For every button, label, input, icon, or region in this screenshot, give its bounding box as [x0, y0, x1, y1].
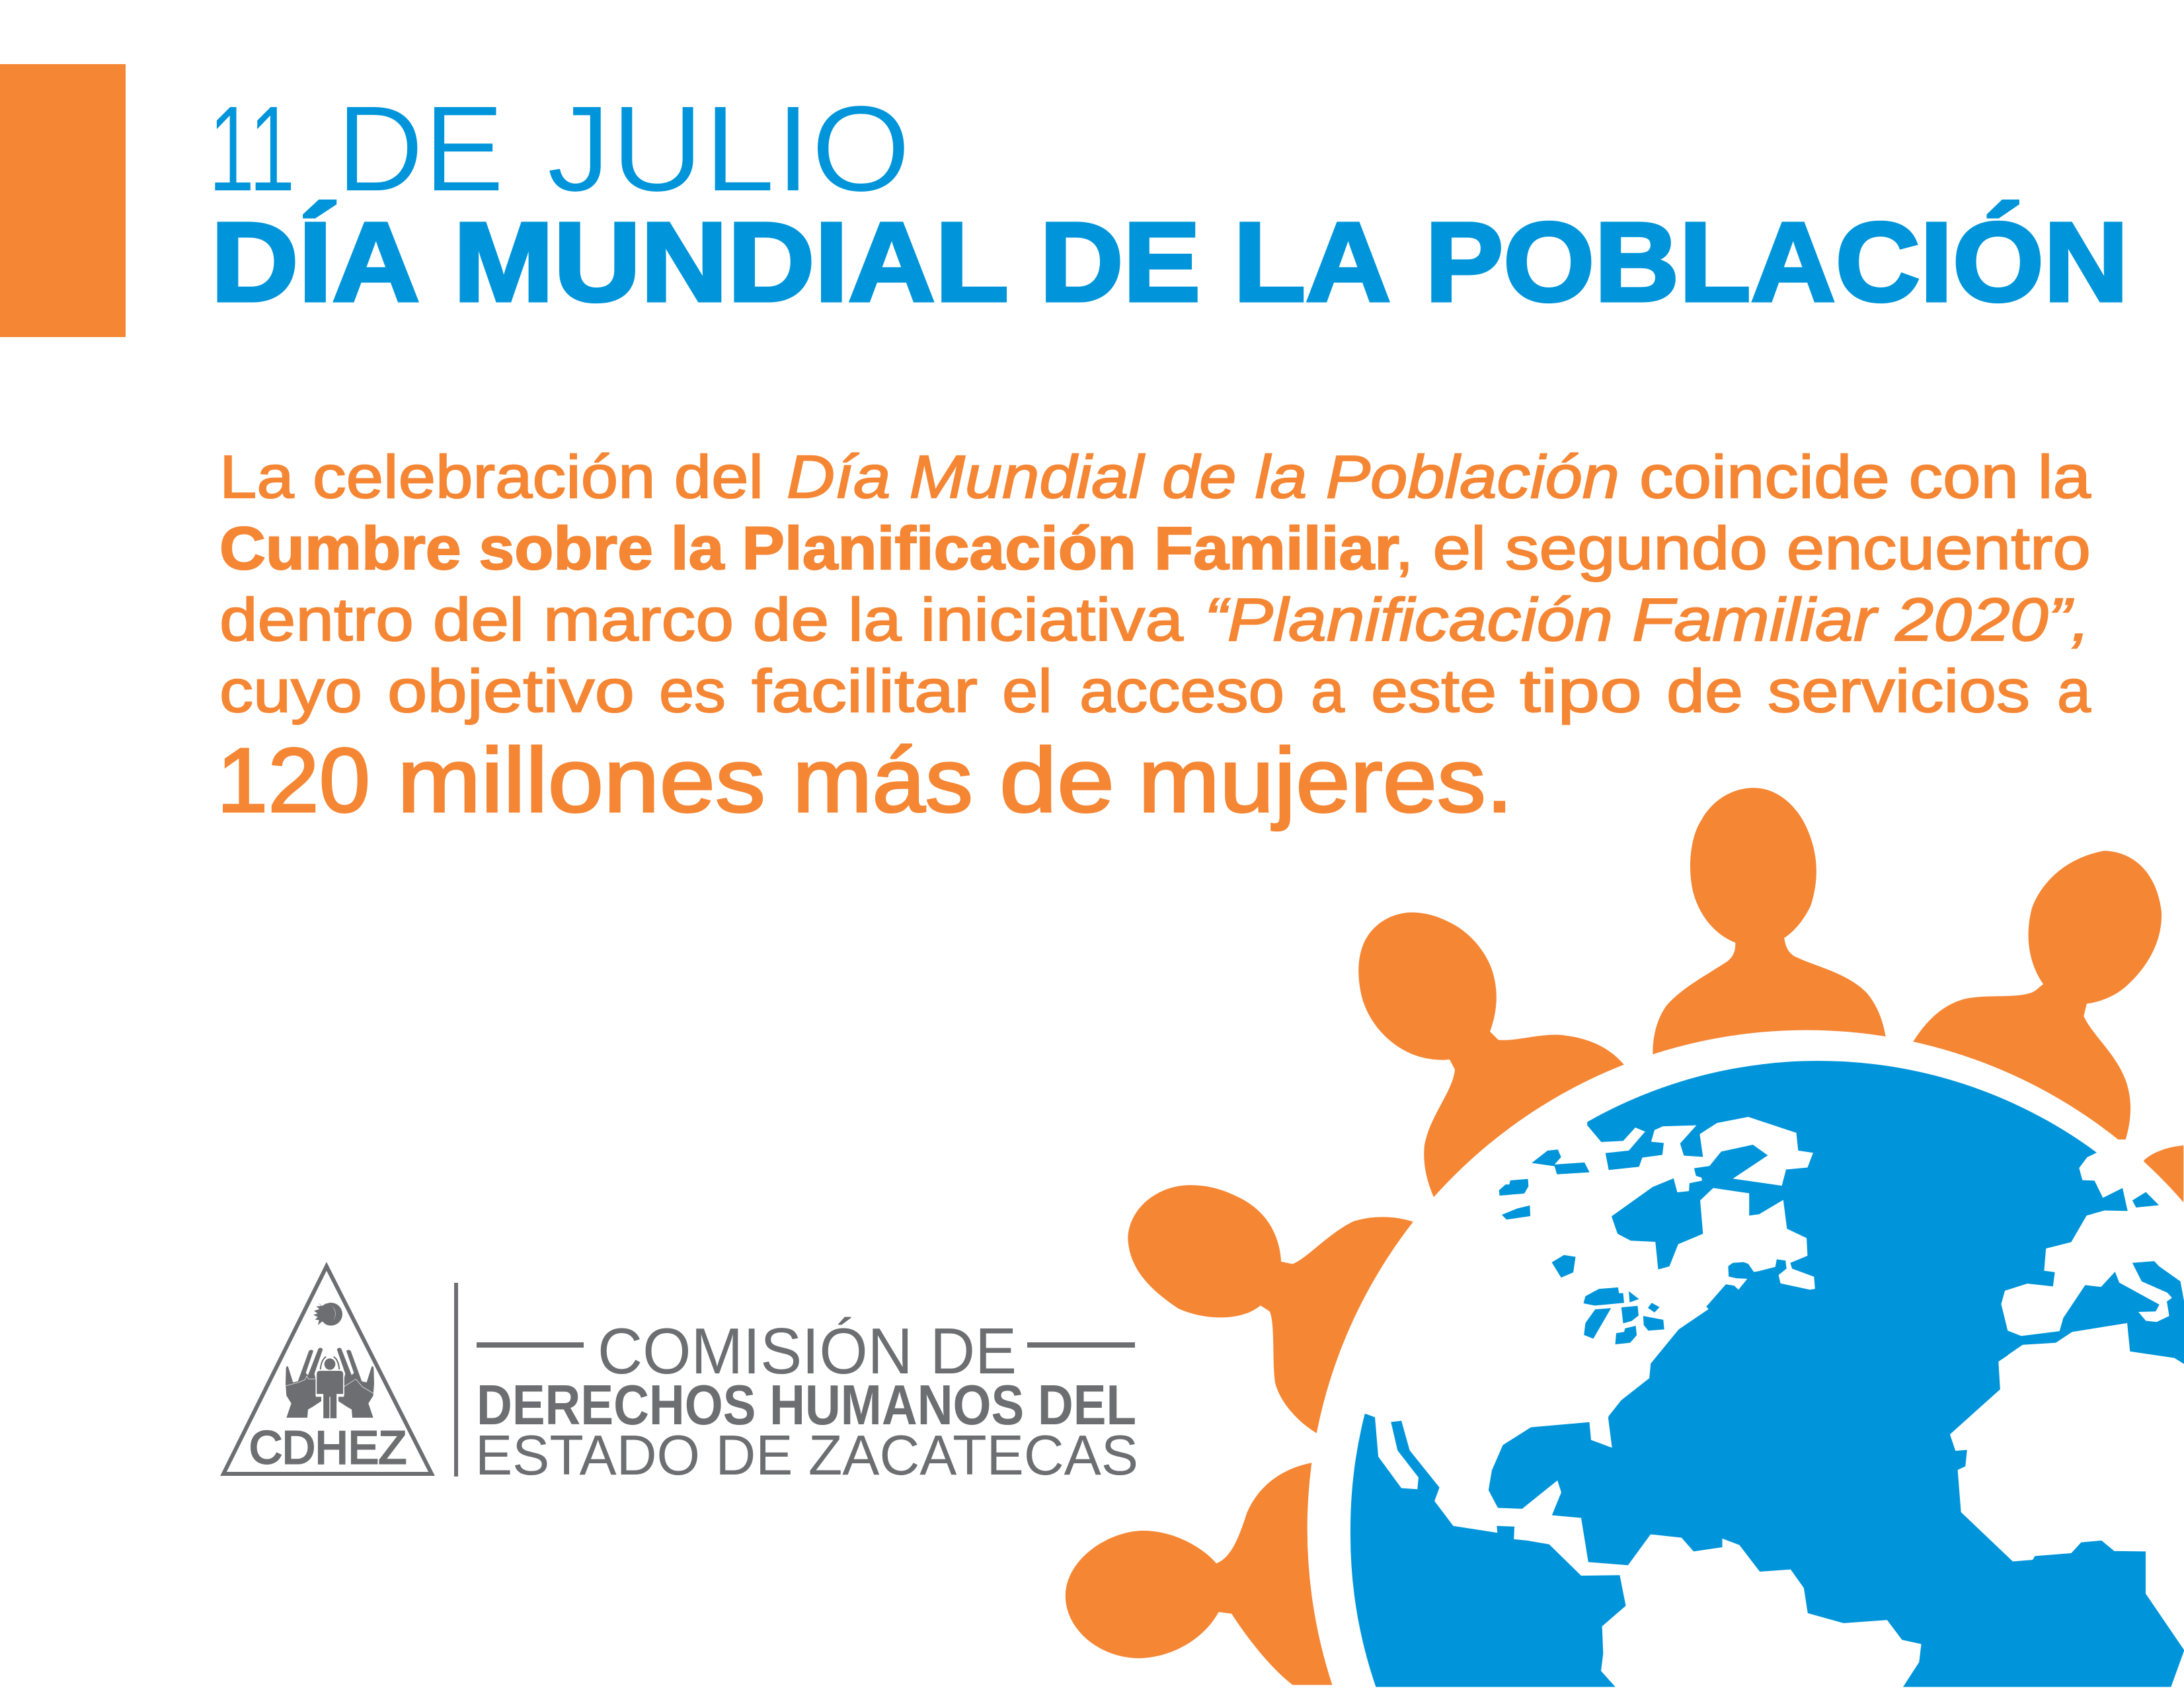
- line 2: [219, 515, 2091, 582]
- organisation line 2: DERECHOS HUMANOS DEL: [477, 1374, 1136, 1437]
- line 3: dentro del marco de la iniciativa: [219, 586, 1184, 654]
- orange people around the globe: [1066, 788, 2183, 1685]
- organisation line 3: ESTADO DE ZACATECAS: [475, 1424, 1138, 1487]
- title date line: [208, 81, 911, 217]
- line 2: Cumbre sobre la Planificación Familiar: [219, 515, 1399, 582]
- person: top centre: [1653, 788, 1885, 1092]
- title date line: JULIO: [547, 81, 911, 217]
- line 4: servicios: [1768, 658, 2030, 725]
- rule right: [1027, 1342, 1135, 1348]
- title main line: DE: [1040, 200, 1200, 325]
- organisation line 1: COMISIÓN DE: [598, 1315, 1017, 1387]
- CDHEZ logo: [223, 1266, 432, 1474]
- line 2: , el segundo encuentro: [1395, 515, 2091, 582]
- logo triangle: [223, 1266, 432, 1474]
- title date line: DE: [336, 81, 504, 217]
- highlighted line: 120 millones: 120: [217, 730, 370, 831]
- logo icon: hands and person: [286, 1348, 374, 1419]
- title main line: LA: [1233, 200, 1391, 325]
- white ring separating people from the globe: [1307, 1030, 2184, 1688]
- line 1: coincide con la: [1639, 443, 2091, 511]
- title main line: POBLACIÓN: [1425, 200, 2128, 325]
- highlighted line: 120 millones: más: [793, 730, 973, 831]
- line 4: de: [1666, 658, 1743, 725]
- person: upper left: [1358, 912, 1625, 1205]
- highlighted line: 120 millones: mujeres.: [1138, 730, 1513, 831]
- line 1: [219, 443, 2091, 511]
- line 4: tipo: [1520, 658, 1642, 725]
- title main line: MUNDIAL: [453, 200, 1009, 325]
- title: [208, 81, 2128, 325]
- organisation name: [475, 1315, 1138, 1487]
- logo wordmark: CDHEZ: [249, 1422, 407, 1473]
- highlighted line: 120 millones: [217, 730, 1513, 831]
- line 4: es: [659, 658, 726, 725]
- line 4: cuyo: [219, 658, 362, 725]
- highlighted line: 120 millones: de: [999, 730, 1114, 831]
- person: right edge fragment: [2144, 1145, 2183, 1211]
- globe: [1322, 1032, 2184, 1687]
- body paragraph: [217, 443, 2091, 831]
- logo icon: sun and moon: [313, 1303, 342, 1326]
- line 4: [219, 658, 2091, 725]
- line 4: el: [1002, 658, 1052, 725]
- person: top right: [1912, 851, 2162, 1139]
- person: left: [1128, 1185, 1415, 1436]
- title main line: DÍA: [211, 200, 420, 325]
- line 4: facilitar: [752, 658, 978, 725]
- globe: main land mass: [1322, 1032, 2184, 1687]
- person: bottom left: [1066, 1463, 1372, 1685]
- rule left: [477, 1342, 584, 1348]
- highlighted line: 120 millones: millones: [397, 730, 765, 831]
- line 4: este: [1371, 658, 1497, 725]
- line 1: Día Mundial de la Población: [787, 443, 1619, 511]
- line 1: La celebración del: [219, 443, 763, 511]
- orange accent block: [0, 64, 126, 337]
- line 4: acceso: [1079, 658, 1284, 725]
- globe: islands: [1499, 1149, 2159, 1344]
- title date line: 11: [208, 81, 295, 217]
- line 4: a: [1311, 658, 1345, 725]
- line 3: “Planificación Familiar 2020”,: [1204, 586, 2090, 654]
- line 3: [219, 586, 2090, 654]
- line 4: objetivo: [387, 658, 635, 725]
- logo divider: [454, 1283, 458, 1477]
- line 4: a: [2057, 658, 2091, 725]
- title main line: [211, 200, 2128, 325]
